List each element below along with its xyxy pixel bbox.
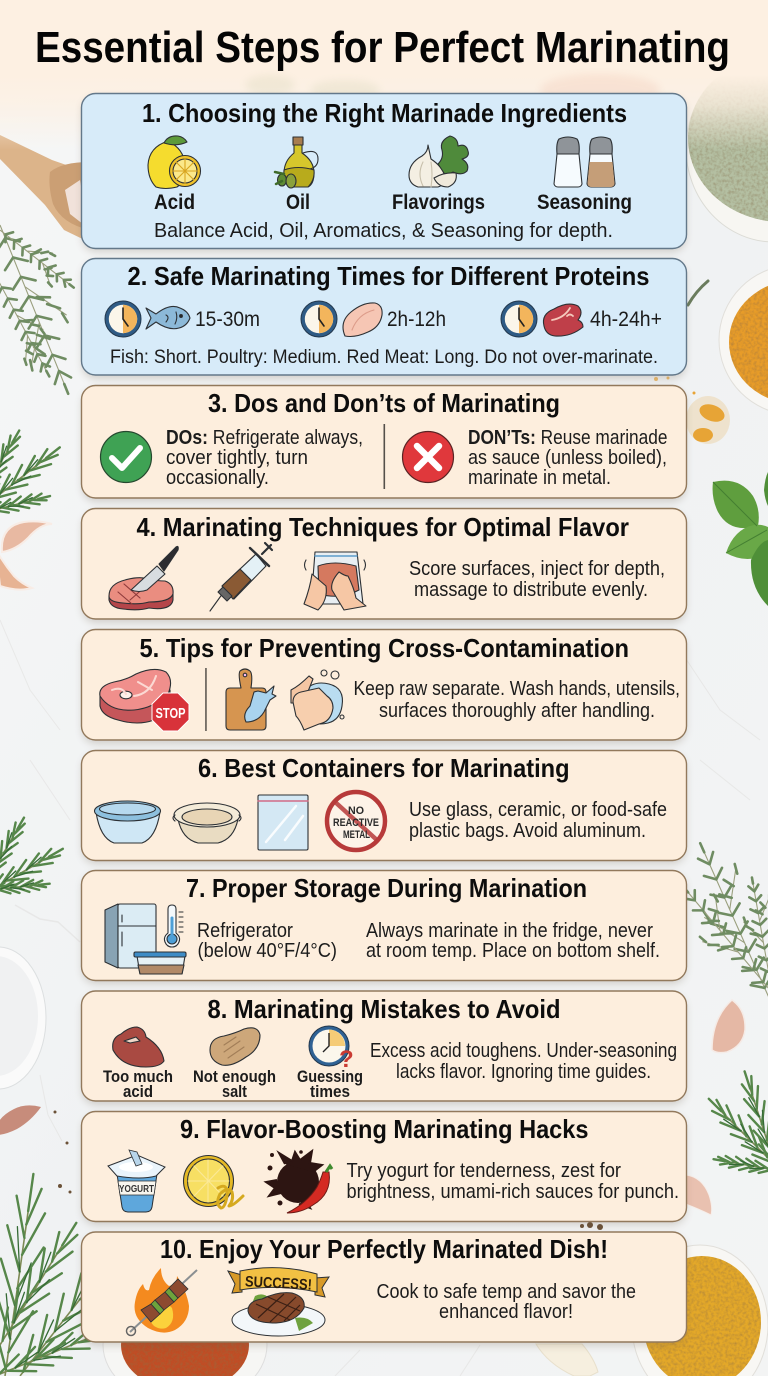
background: thyme sprigs left (0, 215, 94, 403)
background: turmeric bowl bottom (632, 1245, 768, 1376)
divider (384, 424, 385, 489)
icon: ceramic bowl (173, 803, 241, 843)
icon: no reactive metal: METAL (343, 829, 370, 841)
panel 5: cross-contamination (82, 630, 686, 740)
text: enjoy line 1: Cook to safe temp and savor the (376, 1280, 636, 1303)
icon: thermometer (164, 905, 183, 947)
background: salt bowl (0, 947, 46, 1089)
time: red meat: 4h-24h+ (590, 307, 662, 331)
label: too much acid: Too much (103, 1067, 173, 1086)
label: acid: acid (123, 1082, 153, 1101)
icon: yogurt cup (108, 1150, 165, 1212)
background: faint top shapes (245, 74, 660, 106)
label: guessing times: Guessing (297, 1067, 363, 1086)
icon: glass bowl (94, 801, 160, 843)
heading 6: 6. Best Containers for Marinating (198, 753, 570, 783)
background: rosemary bottom left (0, 1171, 133, 1376)
text: dos line 2: cover tightly, turn (166, 446, 308, 469)
icon: green check (100, 432, 152, 482)
heading 2: 2. Safe Marinating Times for Different Proteins (128, 261, 650, 291)
label: oil: Oil (286, 190, 310, 214)
text: refrigerator: Refrigerator (197, 919, 293, 942)
heading 10: 10. Enjoy Your Perfectly Marinated Dish! (160, 1234, 608, 1264)
icon: lemon slice and zest (184, 1156, 243, 1208)
icon: bland chop (210, 1028, 260, 1065)
heading 3: 3. Dos and Don’ts of Marinating (208, 388, 560, 418)
icon: tough steak (113, 1027, 164, 1067)
icon: olive oil bottle (275, 137, 318, 188)
icon: lemon (148, 136, 200, 188)
icon: garlic and parsley (409, 136, 468, 187)
label: not enough salt: Not enough (193, 1067, 276, 1086)
panel 7: storage (82, 870, 686, 980)
background: turmeric scatter (654, 376, 730, 444)
text: technique line 2: massage to distribute evenly. (414, 578, 648, 601)
icon: salt and pepper shakers (554, 137, 615, 187)
text: mistakes line 1: Excess acid toughens. Under-seasoning (370, 1039, 677, 1062)
text: storage line 1: Always marinate in the fridge, never (366, 919, 653, 942)
icon: massage bag with hands (304, 552, 366, 610)
heading 4: 4. Marinating Techniques for Optimal Flavor (136, 512, 629, 542)
heading 7: 7. Proper Storage During Marination (186, 873, 587, 903)
background: small herb sprig (688, 281, 708, 305)
text: hacks line 1: Try yogurt for tenderness, zest for (346, 1159, 621, 1182)
panel 6: containers (82, 750, 686, 860)
background: rosemary left upper (0, 427, 66, 518)
background: garlic clove right (712, 1000, 745, 1053)
icon: no reactive metal: NO (348, 805, 364, 817)
label: acid: Acid (154, 190, 195, 214)
text: containers line 2: plastic bags. Avoid aluminum. (409, 819, 646, 842)
icon: sauce splash and chili (266, 1150, 332, 1213)
heading 1: 1. Choosing the Right Marinade Ingredients (142, 98, 627, 128)
heading 8: 8. Marinating Mistakes to Avoid (208, 994, 560, 1024)
icon: raw steak (100, 669, 171, 723)
panel 3: dos and don'ts (82, 386, 686, 498)
icon: syringe (210, 543, 272, 611)
label: times: times (310, 1082, 350, 1101)
icon: cutting board and glove (226, 669, 276, 730)
text: don'ts line 3: marinate in metal. (468, 466, 611, 489)
label: flavorings: Flavorings (392, 190, 485, 214)
label: seasoning: Seasoning (537, 190, 632, 214)
background: garlic clove bottom (536, 1344, 598, 1376)
time: fish: 15-30m (195, 307, 260, 331)
text: storage line 2: at room temp. Place on bottom shelf. (366, 939, 660, 962)
panel 1: marinade ingredients (82, 94, 686, 248)
icon: success banner and steak plate: SUCCESS! (245, 1273, 312, 1294)
background: basil leaves (713, 472, 768, 606)
icon: chicken breast (343, 303, 382, 336)
text: enjoy line 2: enhanced flavor! (439, 1300, 573, 1323)
background: thyme right (667, 834, 768, 1011)
heading 5: 5. Tips for Preventing Cross-Contamination (140, 633, 629, 663)
icon: red cross (402, 432, 454, 482)
icon: plastic bag (258, 795, 308, 850)
icon: success banner and steak plate (228, 1268, 329, 1336)
text: mistakes line 2: lacks flavor. Ignoring time guides. (396, 1060, 651, 1083)
background: chili bowl bottom (103, 1285, 267, 1376)
icon: stop sign (152, 693, 189, 731)
panel 9: hacks (82, 1112, 686, 1222)
icon: clock with question mark: ? (339, 1046, 354, 1073)
background: garlic clove lower right (683, 1175, 712, 1215)
icon: clock poultry (301, 301, 337, 337)
background: top peach fade (0, 0, 768, 150)
divider (205, 668, 207, 731)
icon: clock with question mark (309, 1026, 354, 1073)
text: hacks line 2: brightness, umami-rich sauces for punch. (346, 1180, 679, 1203)
time: poultry: 2h-12h (387, 307, 446, 331)
background: pepper specks (54, 1110, 603, 1230)
text: wash line 1: Keep raw separate. Wash hands, utensils, (354, 677, 680, 700)
text: don'ts line 2: as sauce (unless boiled), (468, 446, 667, 469)
icon: washing hands (291, 670, 344, 730)
background: marble veins (0, 620, 760, 1376)
background: turmeric bowl (719, 265, 768, 415)
label: salt: salt (222, 1082, 247, 1101)
icon: refrigerator (105, 904, 156, 968)
background: herb bowl (686, 54, 768, 242)
panel shadows (82, 97, 686, 1346)
text: containers line 1: Use glass, ceramic, or food-safe (409, 798, 667, 821)
panel 2: safe marinating times (82, 258, 686, 375)
icon: kebab on flames (126, 1268, 197, 1336)
icon: fish (146, 306, 190, 329)
icon: clock fish (105, 301, 141, 337)
icon: clock red meat (501, 301, 537, 337)
text: dos: DOs: Refrigerate always, (166, 426, 363, 449)
text: don'ts: DON’Ts: Reuse marinade (468, 426, 668, 449)
background: red garlic clove (0, 1105, 41, 1135)
text: dos line 3: occasionally. (166, 466, 269, 489)
icon: yogurt cup: YOGURT (119, 1184, 154, 1195)
background: wooden spoon (0, 134, 95, 245)
background: garlic cloves left (0, 521, 52, 590)
text: technique line 1: Score surfaces, inject for depth, (409, 557, 665, 580)
icon: scoring steak with knife (109, 546, 178, 610)
icon: no reactive metal (327, 792, 385, 850)
icon: stop sign: STOP (156, 705, 186, 722)
caption 1: Balance Acid, Oil, Aromatics, & Seasoning for depth. (154, 219, 613, 242)
icon: food container (134, 952, 186, 974)
panel 4: techniques (82, 508, 686, 619)
panel 10: enjoy (82, 1232, 686, 1342)
panel 8: mistakes (82, 991, 686, 1101)
heading 9: 9. Flavor-Boosting Marinating Hacks (180, 1114, 588, 1144)
icon: raw steak (543, 304, 583, 336)
caption 2: Fish: Short. Poultry: Medium. Red Meat: Long. Do not over-marinate. (110, 346, 658, 368)
icon: no reactive metal: REACTIVE (333, 817, 379, 829)
background: rosemary left middle (0, 814, 67, 899)
text: wash line 2: surfaces thoroughly after handling. (379, 699, 655, 722)
text: below temperature: (below 40°F/4°C) (198, 939, 337, 962)
background: rosemary right (702, 1068, 768, 1176)
